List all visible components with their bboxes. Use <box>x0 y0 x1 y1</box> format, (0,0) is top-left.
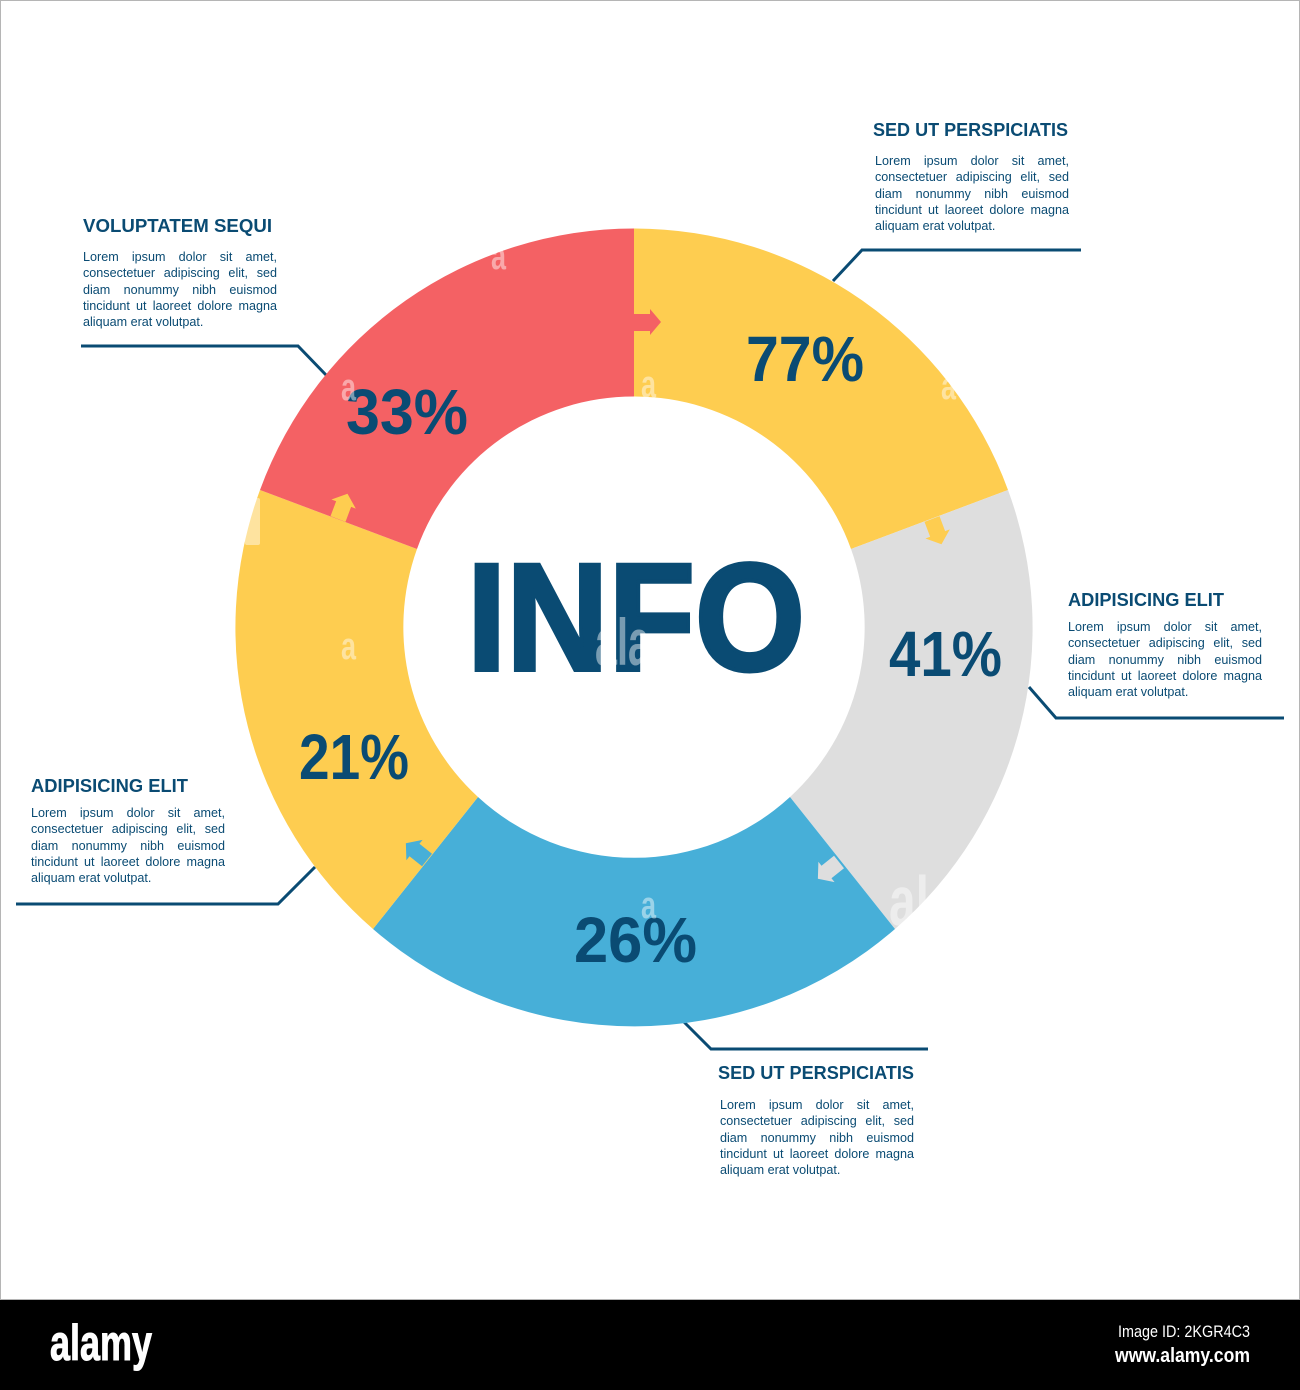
text block: bottom: aliquam erat volutpat. <box>720 1163 840 1177</box>
text block: bottom <box>718 1062 914 1177</box>
text block: bottom left <box>31 775 225 885</box>
text block: right: consectetuer adipiscing elit, sed <box>1068 636 1262 650</box>
text block: bottom left: tincidunt ut laoreet dolore magna <box>31 855 225 869</box>
text block: top right <box>873 119 1069 233</box>
watermark marks: a <box>641 885 657 927</box>
arrow: yellow into grey <box>920 514 954 549</box>
text block: top right: Lorem ipsum dolor sit amet, <box>875 154 1069 168</box>
leader lines <box>16 250 1284 1049</box>
text block: top left: consectetuer adipiscing elit, sed <box>83 266 277 280</box>
watermark marks: a <box>641 364 657 406</box>
text block: top left: diam nonummy nibh euismod <box>83 282 277 296</box>
text block: top right: tincidunt ut laoreet dolore magna <box>875 203 1069 217</box>
text block: bottom left: Lorem ipsum dolor sit amet, <box>31 806 225 820</box>
value 41%: 41% <box>889 618 1002 690</box>
watermark marks: a <box>491 236 507 278</box>
text block: bottom left: aliquam erat volutpat. <box>31 871 151 885</box>
watermark marks: a <box>341 367 357 409</box>
text block: bottom: consectetuer adipiscing elit, sed <box>720 1114 914 1128</box>
footer bar <box>0 1300 1300 1390</box>
watermark marks: a <box>341 626 357 668</box>
value 77%: 77% <box>746 323 864 395</box>
text block: bottom: SED UT PERSPICIATIS <box>718 1062 914 1083</box>
segment: yellow 21% <box>235 490 478 929</box>
arrow: red into yellow <box>634 309 661 335</box>
segment: grey 41% <box>790 490 1033 929</box>
text block: right: diam nonummy nibh euismod <box>1068 652 1262 666</box>
watermark marks: ala <box>595 605 651 679</box>
footer url: www.alamy.com <box>1114 1345 1250 1367</box>
value 26%: 26% <box>574 904 697 976</box>
percentage labels <box>299 323 1002 976</box>
value 21%: 21% <box>299 721 409 793</box>
text block: top left: Lorem ipsum dolor sit amet, <box>83 250 277 264</box>
arrow: blue into yellow <box>398 833 435 870</box>
footer logo: alamy <box>50 1315 152 1371</box>
text block: right: Lorem ipsum dolor sit amet, <box>1068 620 1262 634</box>
footer image id: Image ID: 2KGR4C3 <box>1118 1322 1250 1341</box>
text block: bottom left: ADIPISICING ELIT <box>31 775 189 796</box>
arrow: yellow into red <box>326 489 360 524</box>
segment: red 33% <box>260 228 634 549</box>
text block: bottom: tincidunt ut laoreet dolore magna <box>720 1147 914 1161</box>
text block: bottom: Lorem ipsum dolor sit amet, <box>720 1098 914 1112</box>
watermark marks <box>245 236 957 940</box>
text block: right: ADIPISICING ELIT <box>1068 589 1225 610</box>
watermark marks: a <box>941 366 957 408</box>
text block: top left: VOLUPTATEM SEQUI <box>83 215 272 236</box>
text block: top right: diam nonummy nibh euismod <box>875 186 1069 200</box>
arrow: grey into blue <box>810 852 847 889</box>
text block: top left: aliquam erat volutpat. <box>83 315 203 329</box>
text block: top left <box>83 215 277 329</box>
text block: top right: SED UT PERSPICIATIS <box>873 119 1068 140</box>
text block: right: aliquam erat volutpat. <box>1068 685 1188 699</box>
text block: top left: tincidunt ut laoreet dolore magna <box>83 299 277 313</box>
segment: blue 26% <box>373 797 895 1026</box>
text block: bottom: diam nonummy nibh euismod <box>720 1130 914 1144</box>
center title: INFO <box>467 532 805 703</box>
watermark marks: al <box>889 862 929 940</box>
segment: yellow 77% <box>634 228 1008 549</box>
text block: bottom left: diam nonummy nibh euismod <box>31 838 225 852</box>
text block: top right: consectetuer adipiscing elit, sed <box>875 170 1069 184</box>
donut chart <box>235 228 1033 1026</box>
value 33%: 33% <box>346 376 468 448</box>
text block: bottom left: consectetuer adipiscing elit, sed <box>31 822 225 836</box>
text block: right <box>1068 589 1262 699</box>
text block: right: tincidunt ut laoreet dolore magna <box>1068 669 1262 683</box>
text block: top right: aliquam erat volutpat. <box>875 219 995 233</box>
